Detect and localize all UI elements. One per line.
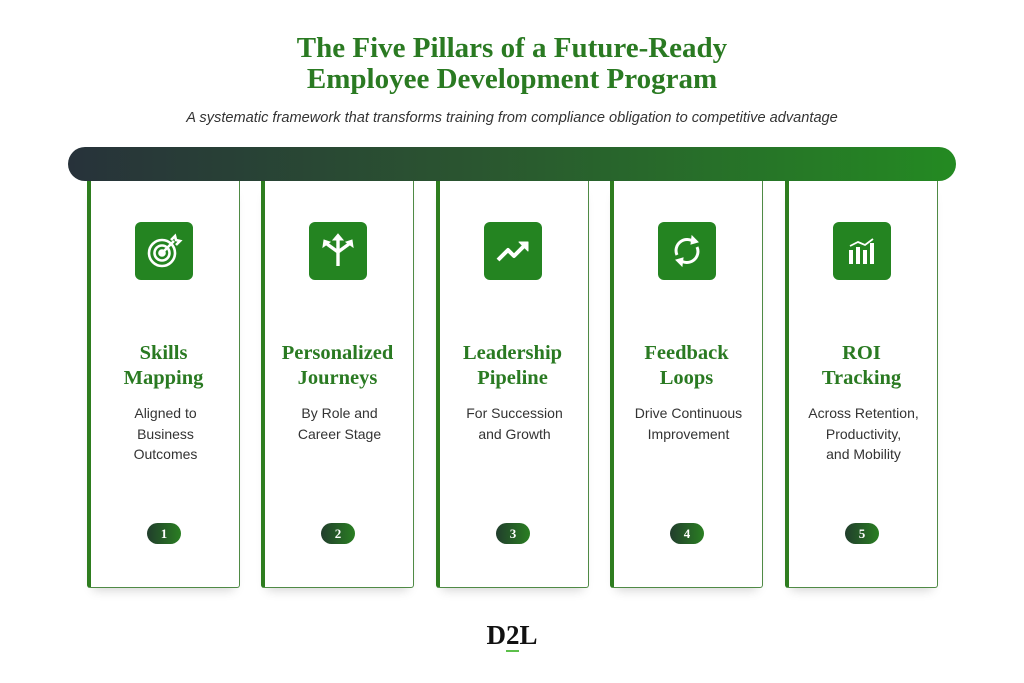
description: and Growth [478, 426, 551, 442]
heading [822, 342, 901, 389]
panel: skills mapping [87, 181, 240, 588]
icon: split arrows [309, 222, 367, 280]
badge 5: 5 [859, 526, 865, 541]
heading: Leadership [463, 342, 562, 364]
heading: Mapping [124, 367, 203, 389]
subtitle: A systematic framework that transforms training from compliance obligation to competitive advantage [186, 110, 838, 126]
panel: feedback loops [610, 181, 763, 588]
heading: Feedback [644, 342, 729, 364]
icon: sync [658, 222, 716, 280]
header bar [68, 147, 956, 181]
heading: ROI [842, 342, 881, 364]
icon: target [135, 222, 193, 280]
heading: Personalized [282, 342, 393, 364]
badge 1: 1 [161, 526, 167, 541]
heading: Loops [660, 367, 713, 389]
heading: Skills [140, 342, 187, 364]
badge 3: 3 [510, 526, 516, 541]
panel: personalized journeys [261, 181, 414, 588]
badge 5 [845, 523, 879, 544]
description [466, 405, 563, 442]
description: Business [137, 426, 194, 442]
description: Career Stage [298, 426, 381, 442]
description: Drive Continuous [635, 405, 742, 421]
badge 4 [670, 523, 704, 544]
description: Aligned to [134, 405, 197, 421]
heading: Pipeline [477, 367, 548, 389]
description: Across Retention, [808, 405, 919, 421]
badge 2 [321, 523, 355, 544]
heading [124, 342, 204, 389]
heading: Tracking [822, 367, 901, 389]
description: Outcomes [134, 446, 197, 462]
badge 2: 2 [335, 526, 341, 541]
heading [644, 342, 729, 389]
description [635, 405, 742, 442]
description: Productivity, [826, 426, 901, 442]
badge 4: 4 [684, 526, 690, 541]
description: By Role and [301, 405, 378, 421]
description: For Succession [466, 405, 563, 421]
description [134, 405, 197, 462]
description: and Mobility [826, 446, 901, 462]
title: Employee Development Program [307, 63, 717, 95]
heading: Journeys [298, 367, 377, 389]
panel: leadership pipeline [436, 181, 589, 588]
description: Improvement [648, 426, 729, 442]
icon: chart [833, 222, 891, 280]
icon: trend up [484, 222, 542, 280]
heading [282, 342, 394, 389]
description [298, 405, 381, 442]
heading [463, 342, 562, 389]
description [808, 405, 919, 462]
badge 3 [496, 523, 530, 544]
title: The Five Pillars of a Future-Ready [297, 32, 727, 64]
panel: roi tracking [785, 181, 938, 588]
logo: D2L [486, 620, 538, 650]
title [297, 32, 727, 95]
badge 1 [147, 523, 181, 544]
